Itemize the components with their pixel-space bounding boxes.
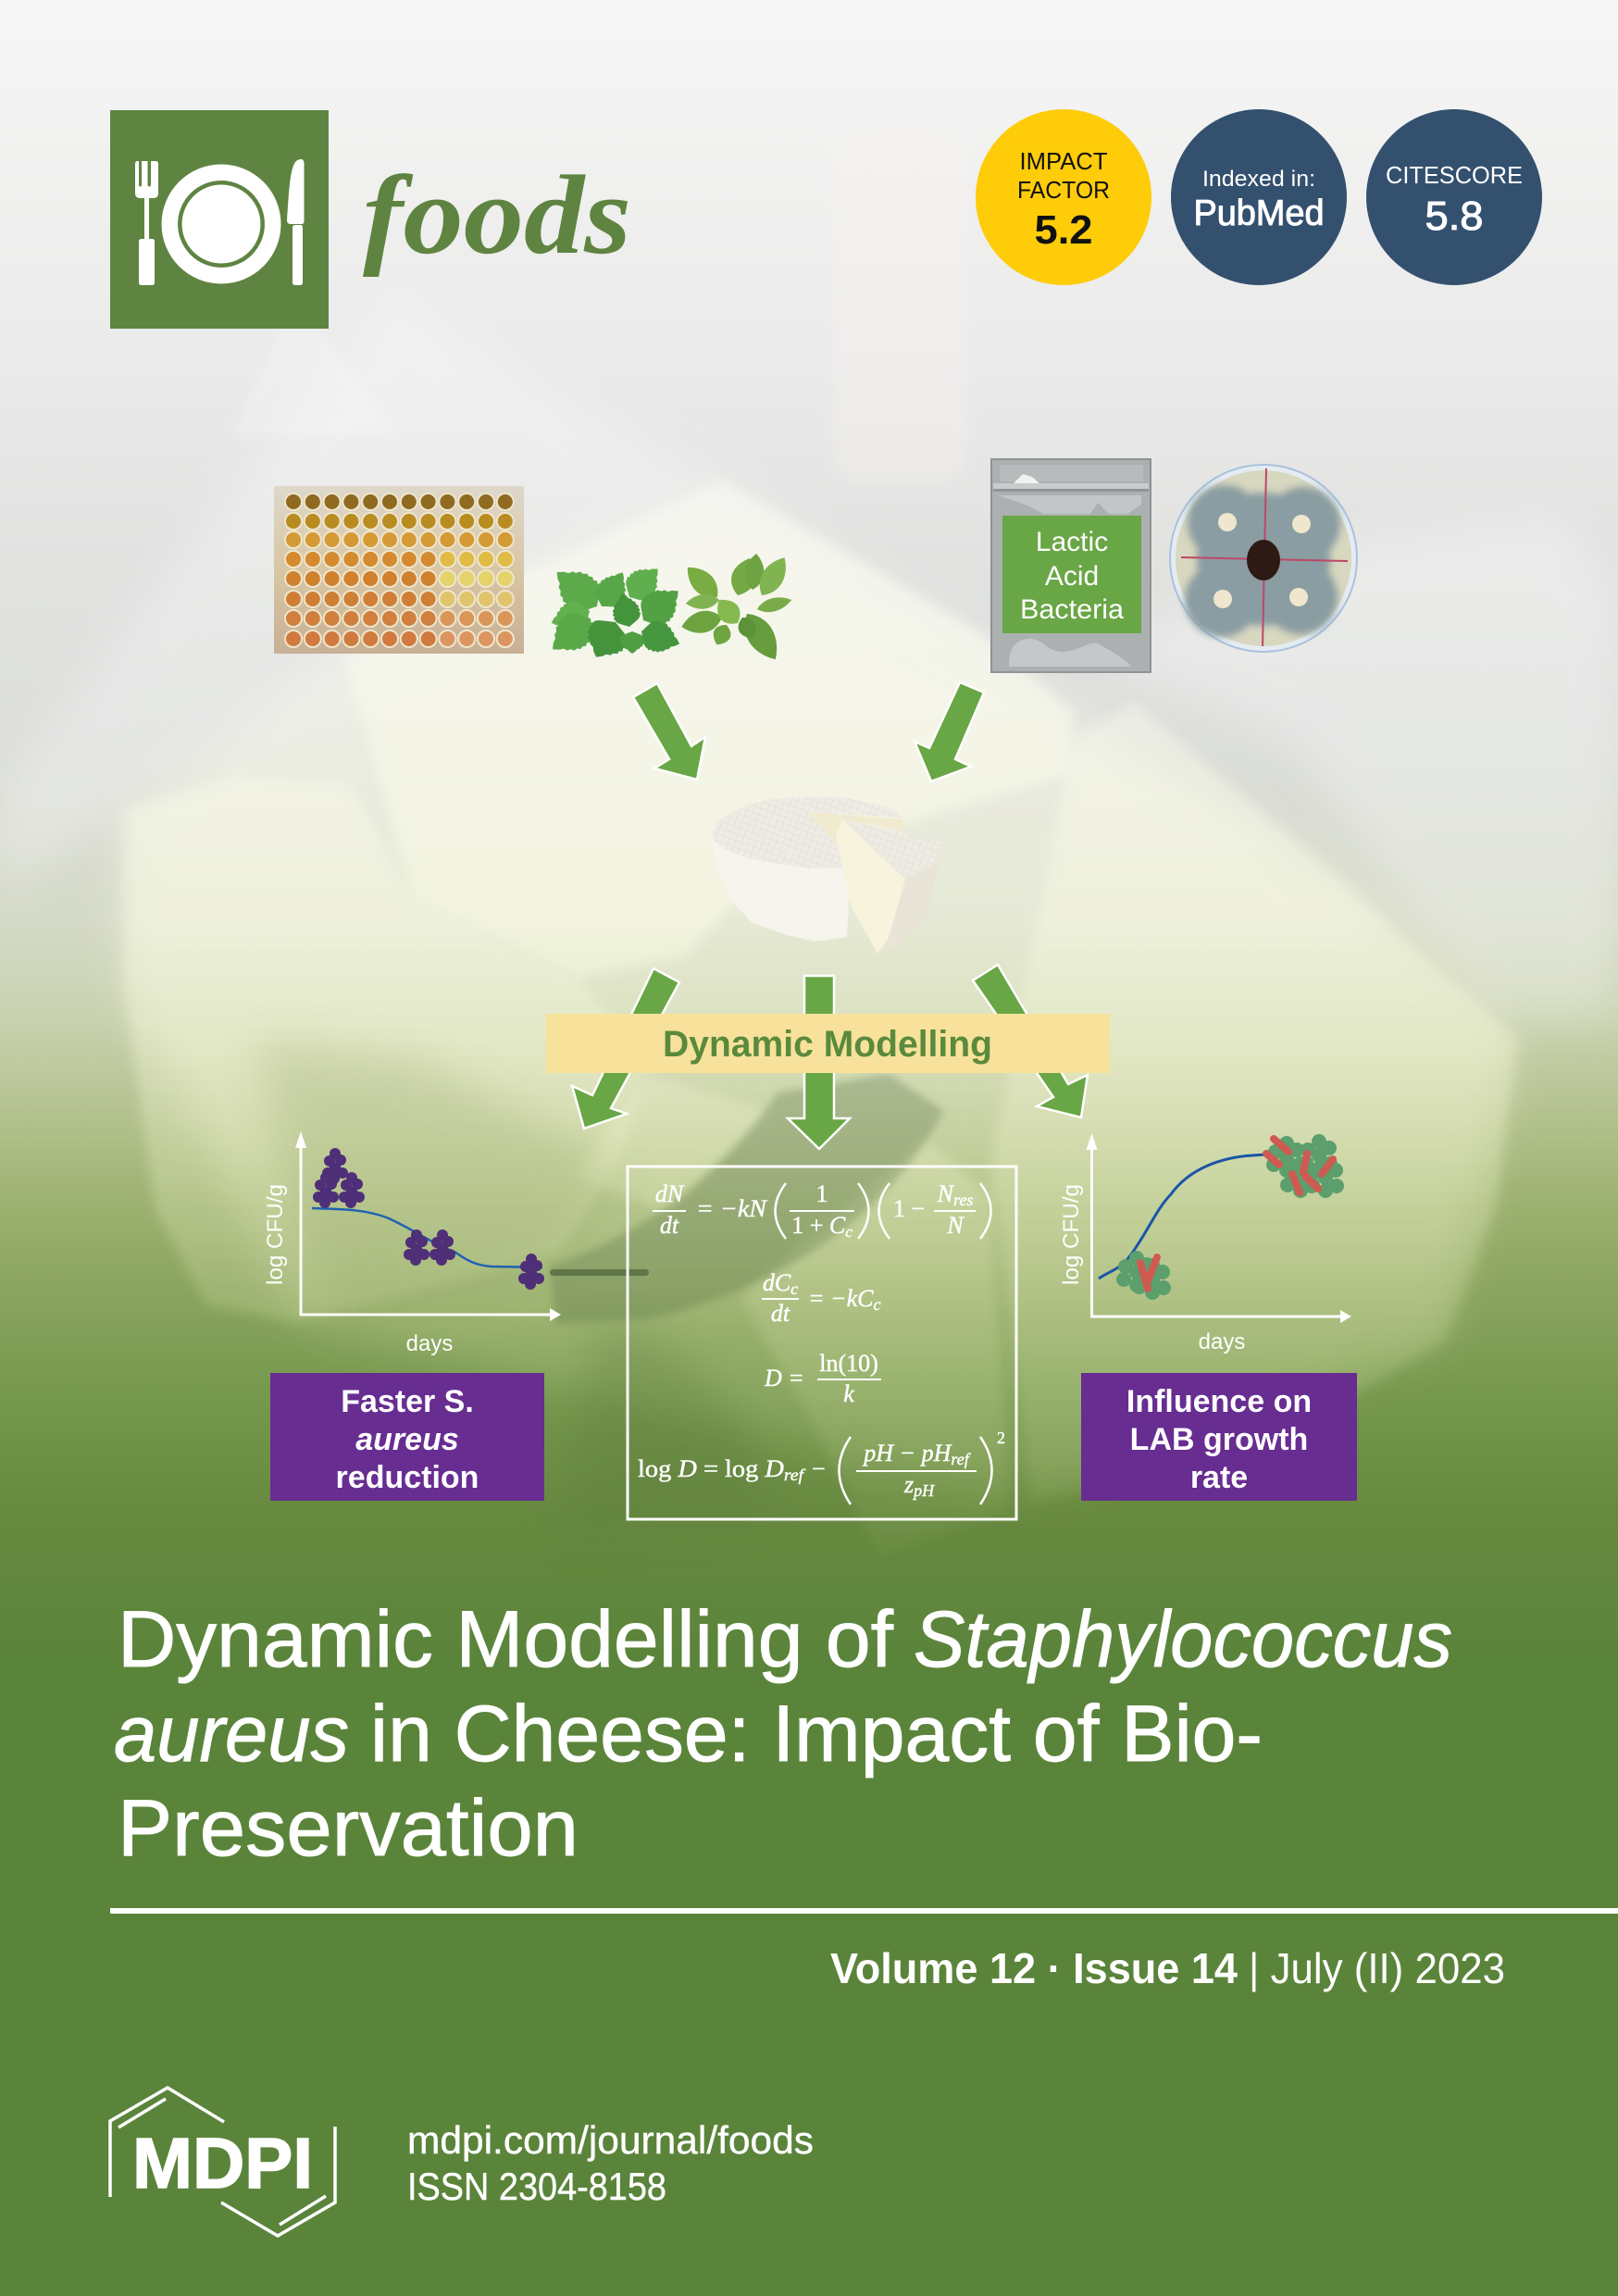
banner: dynamic modelling [546, 1014, 1110, 1073]
arrow: bacteria to cheese [915, 682, 984, 781]
badge: citescore: 5.8 [1425, 193, 1483, 239]
arrow: cheese to left chart [572, 968, 679, 1129]
rods [1140, 1139, 1333, 1289]
badge: citescore [1366, 109, 1542, 285]
icon: plate [161, 165, 281, 283]
equation 1: dt [660, 1212, 679, 1239]
arrow: cheese to equations [788, 976, 850, 1149]
badge: citescore: CITESCORE [1386, 161, 1523, 189]
arrow: herbs to cheese [633, 683, 705, 780]
issue information: Volume 12 · Issue 14 [830, 1944, 1238, 1992]
chart: LAB growth curve [1059, 1133, 1351, 1354]
decline curve [312, 1208, 542, 1267]
badge: indexed in PubMed: Indexed in: [1202, 167, 1315, 192]
journal name: foods [363, 153, 631, 278]
x axis label: days [1199, 1329, 1245, 1354]
axis arrows [295, 1131, 561, 1321]
equation 2: c [873, 1295, 880, 1314]
chart: S. aureus reduction curve [263, 1131, 561, 1356]
bacteria clusters [313, 1148, 544, 1290]
article title: Preservation [118, 1784, 579, 1873]
growth curve [1099, 1152, 1308, 1279]
icon: mint and stevia leaves [541, 552, 793, 668]
equation 4: log D = log D [638, 1455, 782, 1482]
equation 1: N [946, 1212, 965, 1239]
article title: Dynamic Modelling of [118, 1595, 894, 1684]
article title: aureus [114, 1690, 349, 1778]
chart axes [301, 1143, 551, 1315]
equation 4: ref [951, 1450, 972, 1468]
banner: dynamic modelling: Dynamic Modelling [663, 1024, 992, 1065]
equation 2: = −kC [808, 1285, 873, 1312]
equation 1: N [938, 1180, 953, 1207]
equation 1: 1 [816, 1180, 828, 1207]
equation 4 [638, 1429, 1005, 1504]
equation 1: res [953, 1191, 973, 1209]
panel: influence on LAB growth rate [1081, 1373, 1357, 1501]
issue information: | July (II) 2023 [1249, 1944, 1505, 1992]
badge: impact factor: IMPACT [1020, 147, 1108, 175]
icon: knife [287, 159, 304, 285]
panel: faster S. aureus reduction [270, 1373, 544, 1501]
panel: model equations [628, 1167, 1016, 1519]
photo: 96-well plate [274, 486, 524, 654]
badge: indexed in PubMed: PubMed [1194, 193, 1324, 233]
MDPI logo: MDPI [132, 2124, 313, 2203]
equation 3: k [843, 1380, 854, 1407]
MDPI logo [110, 2088, 335, 2236]
equation 1: = −kN [696, 1195, 768, 1222]
y axis label: log CFU/g [263, 1184, 288, 1285]
arrow: cheese to right chart [973, 965, 1088, 1117]
icon: fork [135, 161, 158, 285]
equation 2: dC [763, 1269, 790, 1296]
article title [114, 1595, 1452, 1873]
icon: cheese wheel with wedge [712, 797, 942, 954]
equation 4: z [904, 1471, 914, 1498]
bag label [1020, 527, 1124, 625]
panel: influence on LAB growth rate: LAB growth [1130, 1422, 1308, 1457]
equation 1 [653, 1180, 990, 1241]
panel: influence on LAB growth rate: rate [1190, 1460, 1248, 1495]
LAB clusters [1116, 1134, 1344, 1300]
equation 3: ln(10) [819, 1350, 878, 1377]
article title: in Cheese: Impact of Bio- [370, 1690, 1263, 1778]
photo: petri dish [1170, 465, 1357, 652]
equation 2: c [790, 1279, 798, 1298]
icon: lactic acid bacteria bag [991, 459, 1151, 672]
y axis label: log CFU/g [1059, 1184, 1084, 1285]
equation 1: 1 − [893, 1195, 925, 1222]
badge: impact factor: 5.2 [1035, 207, 1092, 253]
panel: faster S. aureus reduction: aureus [355, 1422, 459, 1457]
equation 4: pH − pH [864, 1440, 951, 1466]
badge: impact factor: FACTOR [1017, 176, 1110, 204]
equation 3: D = [764, 1365, 804, 1391]
equation 2: dt [771, 1300, 790, 1327]
equation 1: 1 + C [791, 1212, 845, 1239]
x axis label: days [406, 1331, 453, 1356]
journal url and ISSN: ISSN 2304-8158 [407, 2165, 666, 2208]
issue information [830, 1944, 1505, 1992]
panel: influence on LAB growth rate: Influence on [1126, 1384, 1312, 1419]
bag label: Bacteria [1020, 594, 1124, 625]
panel: faster S. aureus reduction: Faster S. [341, 1384, 474, 1419]
bag label: Acid [1045, 561, 1099, 592]
axis arrows [1087, 1133, 1351, 1323]
journal url and ISSN [407, 2118, 814, 2208]
equation 2 [762, 1269, 880, 1327]
equation 4: 2 [997, 1429, 1005, 1447]
equation 4: − [812, 1455, 826, 1482]
bag label: Lactic [1036, 527, 1108, 557]
chart axes [1092, 1145, 1342, 1316]
article title: Staphylococcus [914, 1595, 1452, 1684]
equation 1: c [845, 1223, 853, 1241]
equation 4: pH [912, 1481, 935, 1500]
equation 4: ref [784, 1466, 806, 1484]
journal url and ISSN: mdpi.com/journal/foods [407, 2118, 814, 2162]
badge: impact factor [976, 109, 1151, 285]
equation 3 [764, 1350, 881, 1407]
equation 1: dN [655, 1180, 685, 1207]
journal logo: plate, fork and knife [110, 110, 329, 329]
badge: indexed in PubMed [1171, 109, 1347, 285]
panel: faster S. aureus reduction: reduction [336, 1460, 479, 1495]
